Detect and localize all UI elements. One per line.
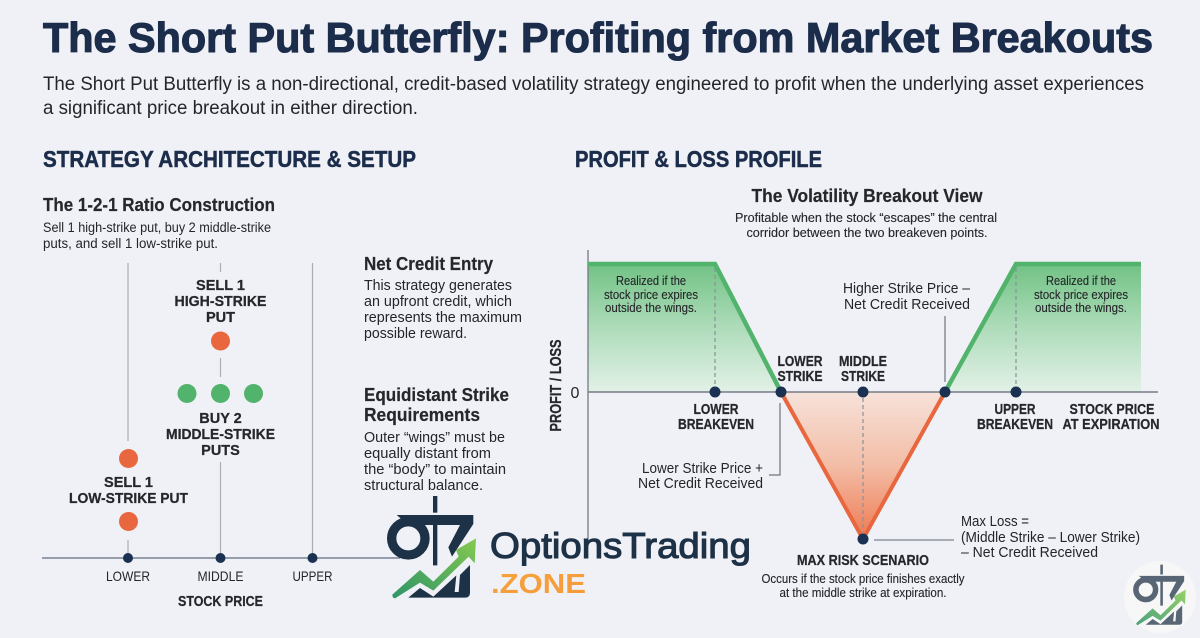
label: x axis [1062,402,1160,433]
leg: sell low strike: SELL 1 [104,475,153,491]
panel: ratio construction [42,194,400,610]
text block: equidistant strikes: Equidistant Strike [364,384,509,405]
max risk scenario: at the middle strike at expiration. [780,586,946,600]
label: middle strike: STRIKE [841,369,885,385]
loss zone [781,392,945,539]
chart heading: volatility breakout view: Profitable when the stock “escapes” the central [735,211,997,225]
axis points and labels: UPPER [292,568,332,584]
ratio description: puts, and sell 1 low-strike put. [43,236,218,251]
icon: small otz mark [1136,565,1186,625]
logo: options trading zone [392,496,751,599]
intro text: The Short Put Butterfly is a non-directional, credit-based volatility strategy engineered to profit when the underlying asset experiences [43,74,1144,95]
text block: net credit entry: This strategy generates [364,278,512,294]
text block: net credit entry: an upfront credit, which [364,294,512,310]
callout: lower breakeven formula: Net Credit Received [638,476,763,492]
leg: sell high strike: SELL 1 [196,278,245,294]
leg: buy middle strike: BUY 2 [199,411,242,427]
right profit zone [945,264,1141,392]
payoff chart [548,250,1160,600]
leg: buy middle strike: MIDDLE-STRIKE [166,427,275,443]
icon: otz mark [392,496,476,598]
leg: sell high strike [174,278,267,350]
callout: max loss formula: Max Loss = [961,514,1029,530]
text block: equidistant strikes: Requirements [364,404,480,425]
leg: sell low strike: LOW-STRIKE PUT [69,491,188,507]
watermark badge [1124,561,1196,633]
ratio heading: The 1-2-1 Ratio Construction [43,194,275,215]
axis points and labels [106,553,332,610]
leg: sell high strike: HIGH-STRIKE [174,294,267,310]
label: upper breakeven: BREAKEVEN [977,417,1053,433]
max risk scenario: MAX RISK SCENARIO [797,553,929,569]
logo zone: .ZONE [491,568,586,599]
text block: equidistant strikes: the “body” to maintain [364,462,506,478]
left profit zone [588,264,781,392]
chart heading: volatility breakout view: corridor between the two breakeven points. [746,226,988,240]
heading: profit and loss: PROFIT & LOSS PROFILE [575,146,822,172]
chart heading: volatility breakout view [735,185,997,240]
note: right profit [1034,274,1128,315]
label: middle strike: MIDDLE [839,354,887,370]
intro text: a significant price breakout in either direction. [43,98,418,119]
axis points and labels: LOWER [106,568,150,584]
note: right profit: outside the wings. [1035,301,1127,315]
y axis label [548,339,580,432]
callout: upper breakeven formula [843,281,971,382]
y axis label: PROFIT / LOSS [548,339,565,432]
note: right profit: Realized if the [1046,274,1116,288]
label: lower breakeven [678,402,754,433]
note: left profit [604,274,698,315]
callout: lower breakeven formula: Lower Strike Price + [642,461,763,477]
strike diagram [42,263,400,610]
logo wordmark: OptionsTrading [490,525,751,566]
callout: upper breakeven formula: Higher Strike Price – [843,281,971,297]
text block: net credit entry: represents the maximum [364,310,522,326]
payoff line: loss [781,392,945,539]
leg: buy middle strike [166,384,275,459]
y axis label: 0 [571,385,580,402]
max risk scenario: Occurs if the stock price finishes exactly [762,572,965,586]
text block: equidistant strikes [364,384,509,494]
label: x axis: AT EXPIRATION [1062,417,1160,433]
leg: sell low strike [69,449,188,531]
max risk scenario [762,553,965,600]
note: left profit: outside the wings. [605,301,697,315]
label: middle strike [839,354,887,385]
heading: strategy architecture: STRATEGY ARCHITECTURE & SETUP [43,146,416,172]
label: lower strike: STRIKE [778,369,823,385]
ratio description: Sell 1 high-strike put, buy 2 middle-strike [43,220,271,235]
callout: max loss formula [874,514,1140,561]
note: right profit: stock price expires [1034,288,1128,302]
label: lower breakeven: BREAKEVEN [678,417,754,433]
text block: net credit entry: possible reward. [364,326,467,342]
axis points and labels: MIDDLE [198,568,244,584]
callout: max loss formula: – Net Credit Received [961,545,1098,561]
chart points [710,386,1022,544]
label: upper breakeven: UPPER [994,402,1036,418]
leg: buy middle strike: PUTS [201,443,240,459]
label: lower breakeven: LOWER [694,402,739,418]
axis points and labels: STOCK PRICE [178,594,263,610]
leg: sell high strike: PUT [206,310,235,326]
text block: equidistant strikes: equally distant from [364,446,491,462]
callout: upper breakeven formula: Net Credit Received [844,297,970,313]
callout: lower breakeven formula [638,403,780,492]
text block: net credit entry [364,253,522,342]
intro text [43,74,1144,119]
title: The Short Put Butterfly: Profiting from Market Breakouts [43,14,1153,61]
label: upper breakeven [977,402,1053,433]
text block: equidistant strikes: Outer “wings” must be [364,430,505,446]
text block: equidistant strikes: structural balance. [364,478,483,494]
callout: max loss formula: (Middle Strike – Lower Strike) [961,530,1140,546]
ratio description [43,220,271,251]
label: lower strike [778,354,823,385]
text block: net credit entry: Net Credit Entry [364,253,494,274]
chart heading: volatility breakout view: The Volatility Breakout View [752,185,983,206]
payoff line: profit [588,264,1141,392]
label: lower strike: LOWER [778,354,823,370]
note: left profit: stock price expires [604,288,698,302]
label: x axis: STOCK PRICE [1070,402,1155,418]
note: left profit: Realized if the [616,274,686,288]
